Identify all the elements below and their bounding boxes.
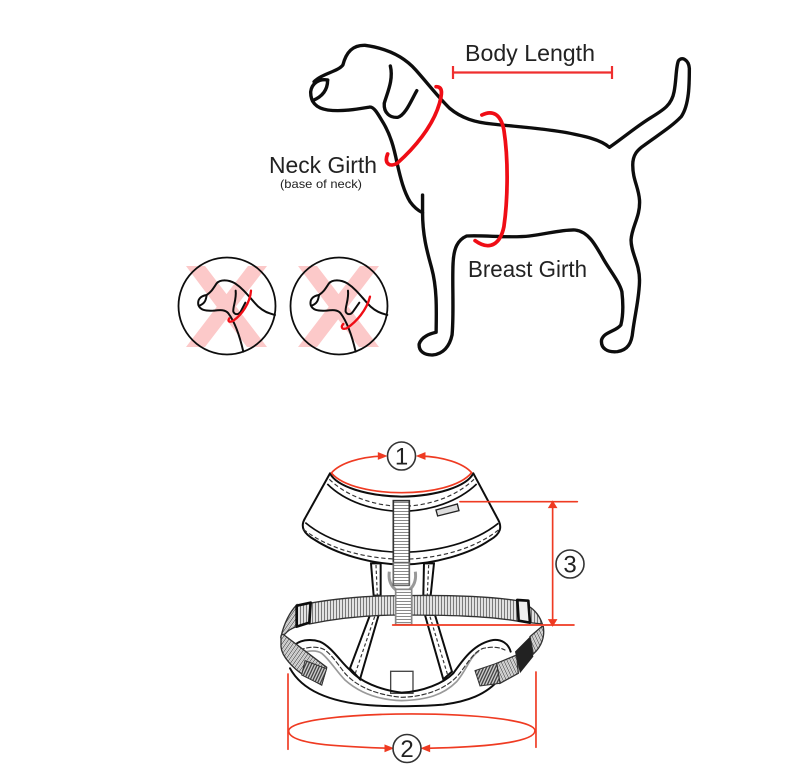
- pink cross: [186, 266, 267, 347]
- strap stitching: [355, 565, 448, 675]
- label: body length: Body Length: [465, 40, 595, 66]
- pad stitching: [300, 647, 505, 697]
- lower body pad: [290, 640, 511, 706]
- circle: [178, 258, 276, 354]
- number badge 2: [393, 734, 421, 763]
- wrong fit example 1: [178, 258, 276, 354]
- measurement lines: [288, 453, 577, 751]
- left slider: [297, 603, 311, 627]
- breast girth strap: [475, 113, 507, 246]
- label: neck girth: Neck Girth: [269, 152, 377, 178]
- measurement 1 loop: [332, 453, 472, 493]
- back panel tag: [391, 671, 413, 693]
- lower straps: [350, 563, 452, 679]
- label: base of neck: (base of neck): [280, 177, 362, 191]
- pad trim band: [300, 651, 478, 701]
- harness diagram: [281, 473, 544, 706]
- dog head: [198, 280, 275, 352]
- number badge 1: [388, 442, 416, 470]
- number badge 2: 2: [400, 736, 414, 763]
- right tab: [475, 663, 500, 686]
- right lower strap: [497, 655, 518, 683]
- chest notch: [418, 195, 428, 213]
- centre webbing: [393, 501, 409, 563]
- number badge 3: [556, 550, 584, 578]
- pad outer edge: [290, 668, 500, 706]
- right buckle: [515, 637, 533, 673]
- left lower side strap: [281, 634, 327, 685]
- circle: [290, 258, 388, 354]
- neck girth strap: [386, 87, 441, 165]
- dog outline: [311, 45, 689, 355]
- ear: [384, 66, 417, 117]
- collar label: [436, 504, 459, 516]
- wrong fit example 2: [290, 258, 388, 354]
- chest strap: [309, 595, 519, 624]
- collar shield: [303, 473, 500, 565]
- dog head: [310, 280, 387, 352]
- left upper side strap: [281, 605, 297, 637]
- left buckle: [302, 661, 327, 685]
- right upper strap: [529, 607, 542, 624]
- collar bands: [303, 479, 499, 559]
- dog measurement diagram: [269, 40, 689, 355]
- measurement 3 bracket: [393, 502, 577, 625]
- number badge 1: 1: [395, 444, 408, 470]
- right slider: [517, 600, 530, 623]
- measurement 2 loop: [288, 672, 536, 751]
- D-ring: [389, 572, 416, 593]
- nose line: [312, 80, 328, 101]
- pink cross: [298, 266, 379, 347]
- label: breast girth: Breast Girth: [468, 256, 587, 282]
- pad inner edge: [293, 640, 511, 693]
- right side strap: [530, 627, 544, 654]
- body length bracket: [453, 66, 612, 79]
- number badge 3: 3: [563, 552, 577, 578]
